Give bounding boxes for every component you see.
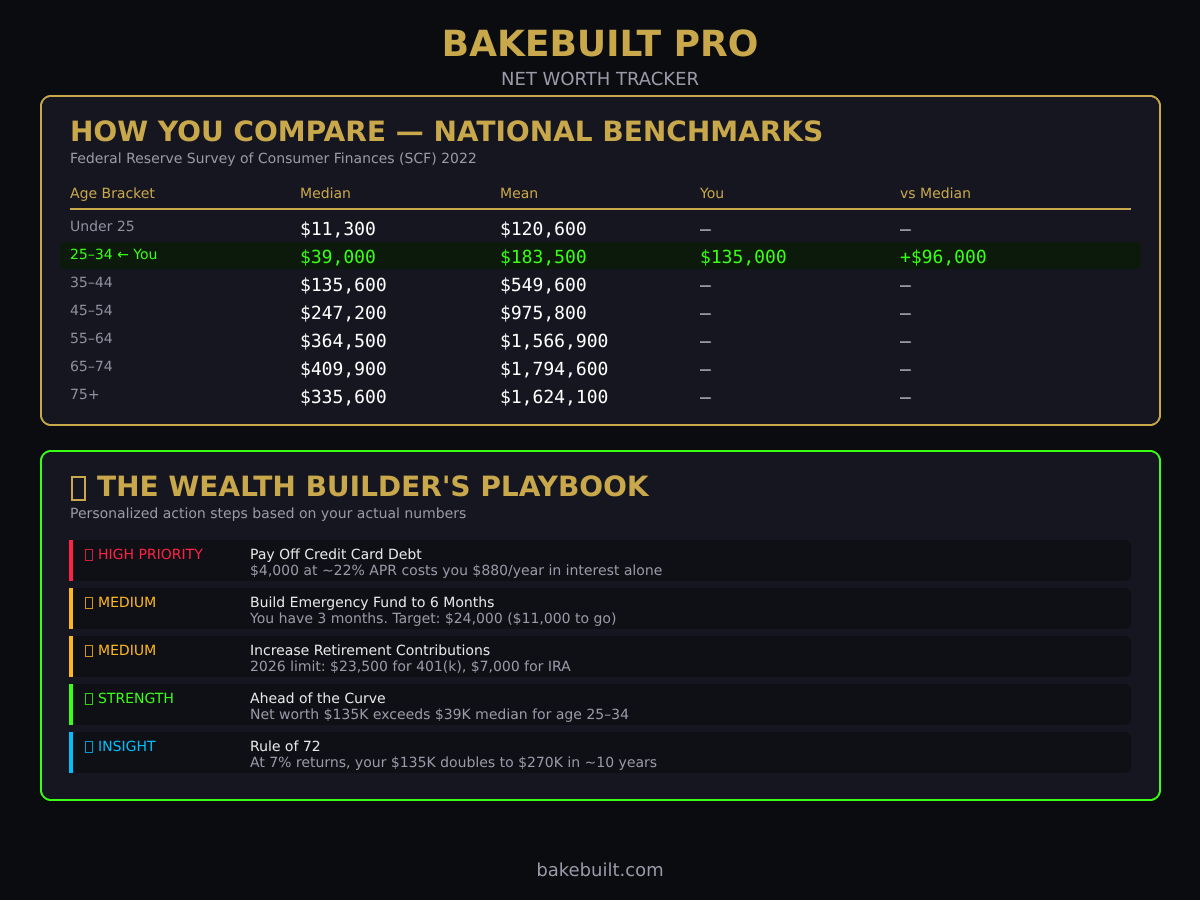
action: rule of 72: At 7% returns, your $135K doubles to $270K in ~10 years <box>250 755 657 771</box>
row highlight: 25–34 you: +$96,000 <box>900 247 987 268</box>
heading: benchmarks: HOW YOU COMPARE — NATIONAL BENCHMARKS <box>70 115 823 148</box>
action: emergency fund: Build Emergency Fund to 6 Months <box>250 595 494 611</box>
action: emergency fund <box>69 588 1131 629</box>
row: 55–64: $1,566,900 <box>500 331 608 352</box>
subtitle: NET WORTH TRACKER <box>501 69 699 90</box>
heading: playbook: THE WEALTH BUILDER'S PLAYBOOK <box>97 470 649 503</box>
table header: Median <box>300 186 351 202</box>
row: under 25: — <box>700 219 711 240</box>
row: 65–74: — <box>900 359 911 380</box>
action: emergency fund: You have 3 months. Target: $24,000 ($11,000 to go) <box>250 611 616 627</box>
row: 45–54: — <box>700 303 711 324</box>
action: ahead of the curve: Net worth $135K exceeds $39K median for age 25–34 <box>250 707 629 723</box>
action: pay off credit card debt: Pay Off Credit Card Debt <box>250 547 422 563</box>
row: 35–44: $135,600 <box>300 275 387 296</box>
row: 35–44: $549,600 <box>500 275 587 296</box>
action: pay off credit card debt: HIGH PRIORITY <box>98 547 203 563</box>
action: pay off credit card debt: $4,000 at ~22% APR costs you $880/year in interest alone <box>250 563 662 579</box>
table header: vs Median <box>900 186 971 202</box>
action: ahead of the curve: Ahead of the Curve <box>250 691 386 707</box>
row: 45–54: $975,800 <box>500 303 587 324</box>
action: rule of 72: INSIGHT <box>98 739 156 755</box>
row: 55–64 <box>70 331 911 352</box>
action: rule of 72: Rule of 72 <box>250 739 321 755</box>
row: 65–74: — <box>700 359 711 380</box>
row: 55–64: 55–64 <box>70 331 113 347</box>
row: 55–64: $364,500 <box>300 331 387 352</box>
row: 65–74 <box>70 359 911 380</box>
row: under 25: Under 25 <box>70 219 135 235</box>
row: under 25 <box>70 219 911 240</box>
row: under 25: $11,300 <box>300 219 376 240</box>
panel: playbook <box>40 450 1161 801</box>
row: 45–54: $247,200 <box>300 303 387 324</box>
action: ahead of the curve: STRENGTH <box>98 691 174 707</box>
row: under 25: $120,600 <box>500 219 587 240</box>
row: 45–54: 45–54 <box>70 303 113 319</box>
action: retirement contributions: MEDIUM <box>98 643 156 659</box>
row highlight: 25–34 you <box>60 242 1141 269</box>
row highlight: 25–34 you: $39,000 <box>300 247 376 268</box>
footer: bakebuilt.com <box>536 860 664 881</box>
action: retirement contributions: 2026 limit: $23,500 for 401(k), $7,000 for IRA <box>250 659 571 675</box>
action: ahead of the curve <box>69 684 1131 725</box>
source note: Federal Reserve Survey of Consumer Finances (SCF) 2022 <box>70 151 477 167</box>
row: 75+ <box>70 387 911 408</box>
row: 75+: $1,624,100 <box>500 387 608 408</box>
table header: You <box>700 186 724 202</box>
panel: national benchmarks <box>40 95 1161 426</box>
row: 35–44: — <box>900 275 911 296</box>
action: retirement contributions: Increase Retirement Contributions <box>250 643 490 659</box>
row: 45–54 <box>70 303 911 324</box>
row: 65–74: $409,900 <box>300 359 387 380</box>
row: 75+: — <box>900 387 911 408</box>
action: retirement contributions <box>69 636 1131 677</box>
table header <box>70 187 1131 210</box>
row: 35–44: — <box>700 275 711 296</box>
table header: Age Bracket <box>70 186 155 202</box>
row: 75+: $335,600 <box>300 387 387 408</box>
row: under 25: — <box>900 219 911 240</box>
title: BAKEBUILT PRO <box>442 24 758 65</box>
row: 45–54: — <box>900 303 911 324</box>
action: pay off credit card debt <box>69 540 1131 581</box>
action: emergency fund: MEDIUM <box>98 595 156 611</box>
row: 55–64: — <box>900 331 911 352</box>
row: 35–44 <box>70 275 911 296</box>
table header: Mean <box>500 186 538 202</box>
action: rule of 72 <box>69 732 1131 773</box>
row: 35–44: 35–44 <box>70 275 113 291</box>
row: 75+: 75+ <box>70 387 100 403</box>
row: 75+: — <box>700 387 711 408</box>
row highlight: 25–34 you: $135,000 <box>700 247 787 268</box>
row: 55–64: — <box>700 331 711 352</box>
row: 65–74: $1,794,600 <box>500 359 608 380</box>
playbook subtitle: Personalized action steps based on your actual numbers <box>70 506 466 522</box>
row highlight: 25–34 you: 25–34 ← You <box>70 247 157 263</box>
row highlight: 25–34 you: $183,500 <box>500 247 587 268</box>
row: 65–74: 65–74 <box>70 359 113 375</box>
